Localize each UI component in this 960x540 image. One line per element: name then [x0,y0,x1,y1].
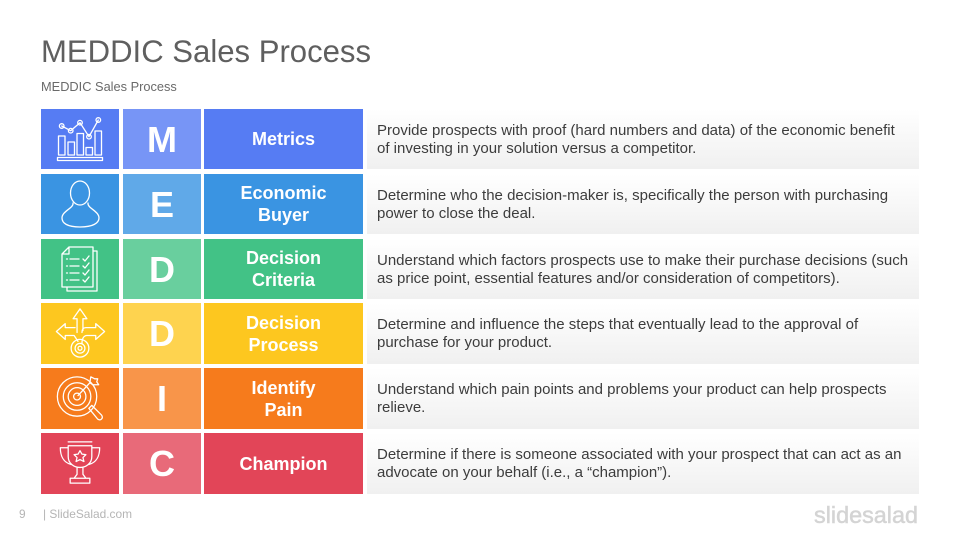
letter D [123,303,201,364]
description: of investing in your solution versus a competitor. [377,140,696,156]
description: Determine and influence the steps that eventually lead to the approval of [377,316,858,333]
description: Understand which pain points and problems your product can help prospects [377,381,886,398]
description: Understand which factors prospects use to make their purchase decisions (such [377,252,908,268]
label [204,433,363,494]
label: Process [248,334,319,354]
footer text: | SlideSalad.com [43,507,132,521]
letter D: D [149,249,175,290]
label: Decision [246,248,321,268]
letter E [123,174,201,234]
label: Economic [240,183,327,203]
description: relieve. [377,399,425,416]
description [367,174,919,234]
label: Metrics [252,129,315,149]
letter I: I [157,378,167,419]
letter I [123,368,201,429]
subtitle: MEDDIC Sales Process [41,79,177,94]
description: Determine who the decision-maker is, specifically the person with purchasing [377,186,888,204]
description: Provide prospects with proof (hard numbers and data) of the economic benefit [377,122,895,138]
description [367,109,919,169]
row: Champion [41,433,919,494]
description [367,433,919,494]
description: power to close the deal. [377,204,535,222]
icon: person [41,174,119,234]
row: Decision Process [41,303,919,364]
label: Pain [264,400,302,420]
letter M: M [147,119,177,160]
letter C: C [149,443,175,484]
icon: trophy [41,433,119,494]
label: Champion [240,454,328,474]
description [367,368,919,429]
row: Decision Criteria [41,239,919,299]
label [204,239,363,299]
letter E: E [150,184,174,225]
description: Determine if there is someone associated with your prospect that can act as an [377,446,901,463]
label [204,303,363,364]
letter M [123,109,201,169]
logo wordmark: slidesalad [814,502,918,528]
description: as price point, essential features and/or consideration of competitors). [377,270,840,286]
row: Economic Buyer [41,174,919,234]
label: Decision [246,312,321,332]
label [204,368,363,429]
label: Criteria [252,270,315,290]
letter D: D [149,313,175,354]
title: MEDDIC Sales Process [41,34,371,69]
label [204,174,363,234]
icon: chart [41,109,119,169]
row: Identify Pain [41,368,919,429]
letter C [123,433,201,494]
row: Metrics [41,109,919,169]
page number: 9 [19,507,26,521]
icon: checklist [41,239,119,299]
label [204,109,363,169]
description [367,303,919,364]
description: purchase for your product. [377,334,552,351]
icon: target and magnifier [41,368,119,429]
label: Identify [251,378,316,398]
description [367,239,919,299]
icon: arrows and gear [41,303,119,364]
label: Buyer [258,205,309,225]
description: advocate on your behalf (i.e., a “champion”). [377,464,671,481]
letter D [123,239,201,299]
